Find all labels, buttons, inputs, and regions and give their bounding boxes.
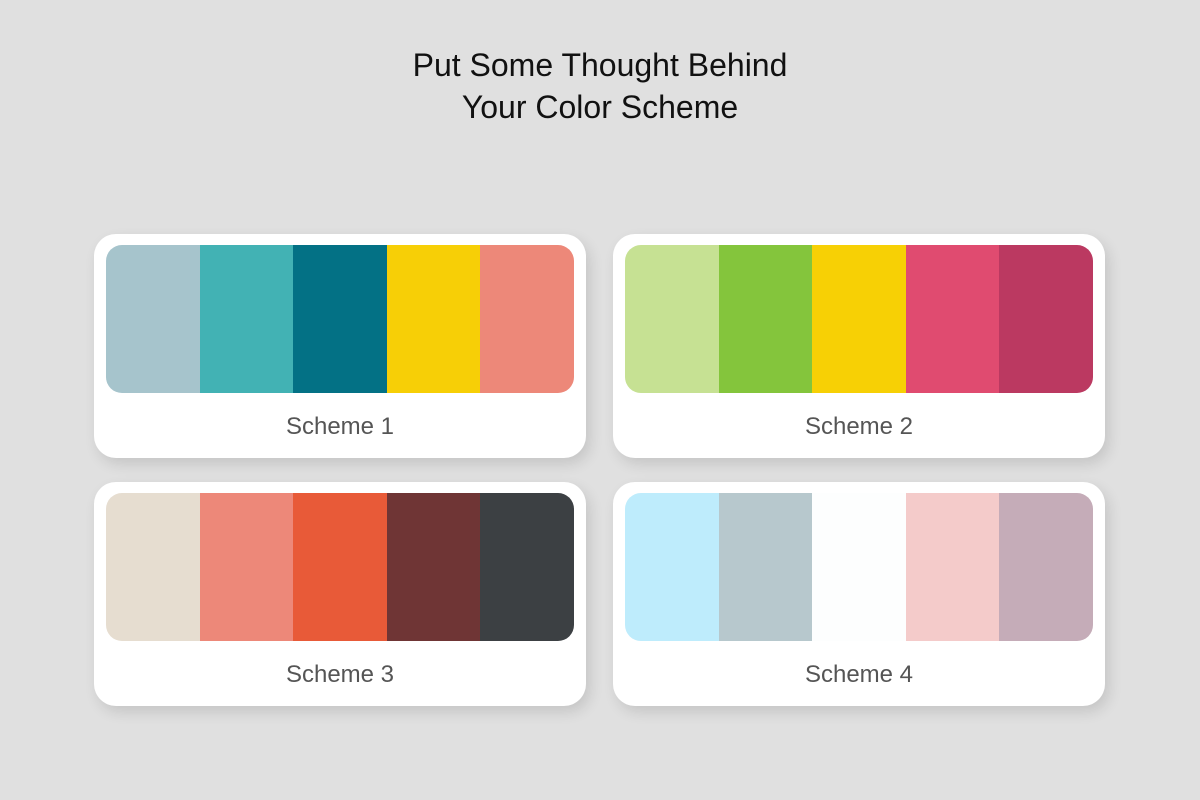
title: Your Color Scheme [462,89,738,125]
label: scheme 4: Scheme 4 [805,661,913,688]
palette: scheme 2 [625,245,1093,393]
panel: scheme 4 [613,482,1105,706]
panel: scheme 1 [94,234,586,458]
label: scheme 2: Scheme 2 [805,413,913,440]
title: Put Some Thought Behind [413,47,787,83]
title [413,47,787,125]
label: scheme 3: Scheme 3 [286,661,394,688]
palette: scheme 4 [625,493,1093,641]
panel: scheme 3 [94,482,586,706]
panel: scheme 2 [613,234,1105,458]
palette: scheme 3 [106,493,574,641]
palette: scheme 1 [106,245,574,393]
label: scheme 1: Scheme 1 [286,413,394,440]
